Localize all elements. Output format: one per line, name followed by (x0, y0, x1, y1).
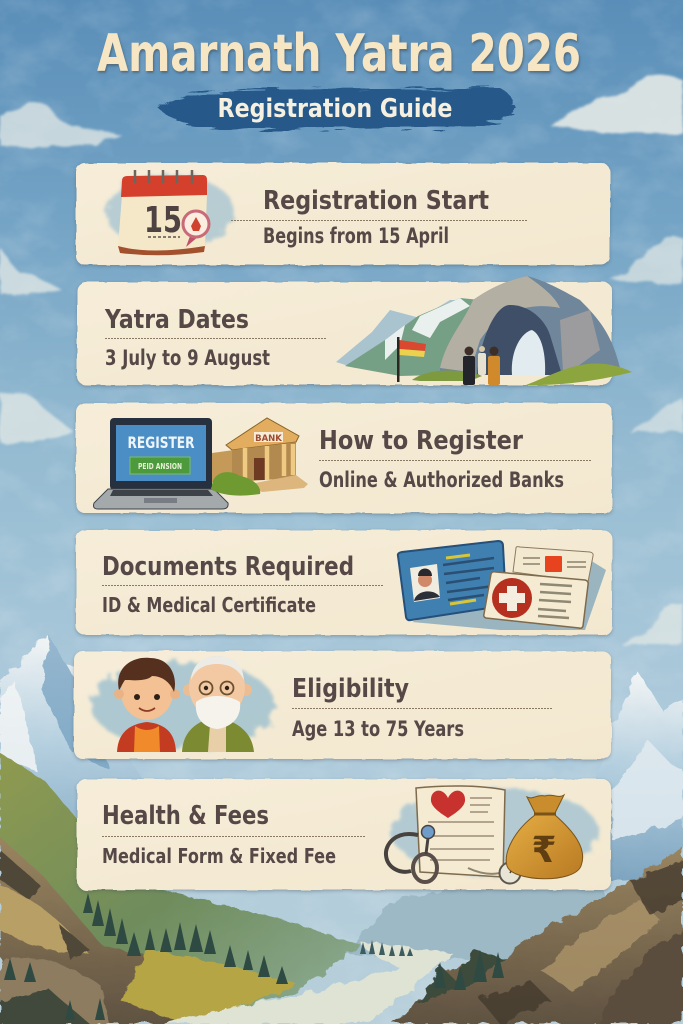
icon: calendar (106, 170, 234, 255)
panel: how to register (76, 403, 612, 513)
icon: calendar: 15 (144, 200, 182, 241)
panel: registration start (76, 163, 610, 265)
description: ID & Medical Certificate (102, 593, 316, 617)
description: Medical Form & Fixed Fee (102, 844, 336, 868)
heading: Health & Fees (102, 801, 269, 831)
icon: child and elder (91, 656, 275, 752)
heading: Registration Start (263, 186, 489, 216)
icon: medical form, stethoscope and money bag (386, 786, 599, 884)
clouds (0, 75, 683, 646)
subtitle banner (158, 88, 513, 130)
pine trees (4, 893, 504, 1020)
panel: health and fees (77, 779, 611, 890)
heading: Eligibility (292, 674, 409, 704)
panel: yatra dates (77, 276, 632, 385)
illustration: cave and pilgrims (336, 276, 632, 385)
icon: laptop: PEID ANSION (138, 462, 182, 471)
description: Online & Authorized Banks (319, 468, 564, 492)
panel: eligibility (74, 651, 611, 759)
heading: Yatra Dates (104, 305, 249, 335)
icon: medical form, stethoscope and money bag: ₹ (531, 830, 557, 871)
panel: documents required (76, 530, 612, 635)
description: Begins from 15 April (263, 224, 449, 248)
icon: laptop: REGISTER (128, 433, 194, 452)
icon: laptop (94, 418, 228, 509)
child (114, 658, 180, 752)
description: 3 July to 9 August (105, 346, 270, 370)
heading: Documents Required (102, 552, 354, 582)
subtitle banner: Registration Guide (218, 94, 452, 124)
description: Age 13 to 75 Years (292, 717, 464, 741)
icon: bank building (212, 418, 308, 496)
elder (182, 656, 254, 752)
foreground valley and slopes (0, 753, 683, 1024)
icon: ID and medical cards (398, 541, 606, 630)
distant snowy mountains (0, 634, 683, 960)
heading: How to Register (319, 426, 523, 456)
icon: bank building: BANK (255, 434, 282, 444)
